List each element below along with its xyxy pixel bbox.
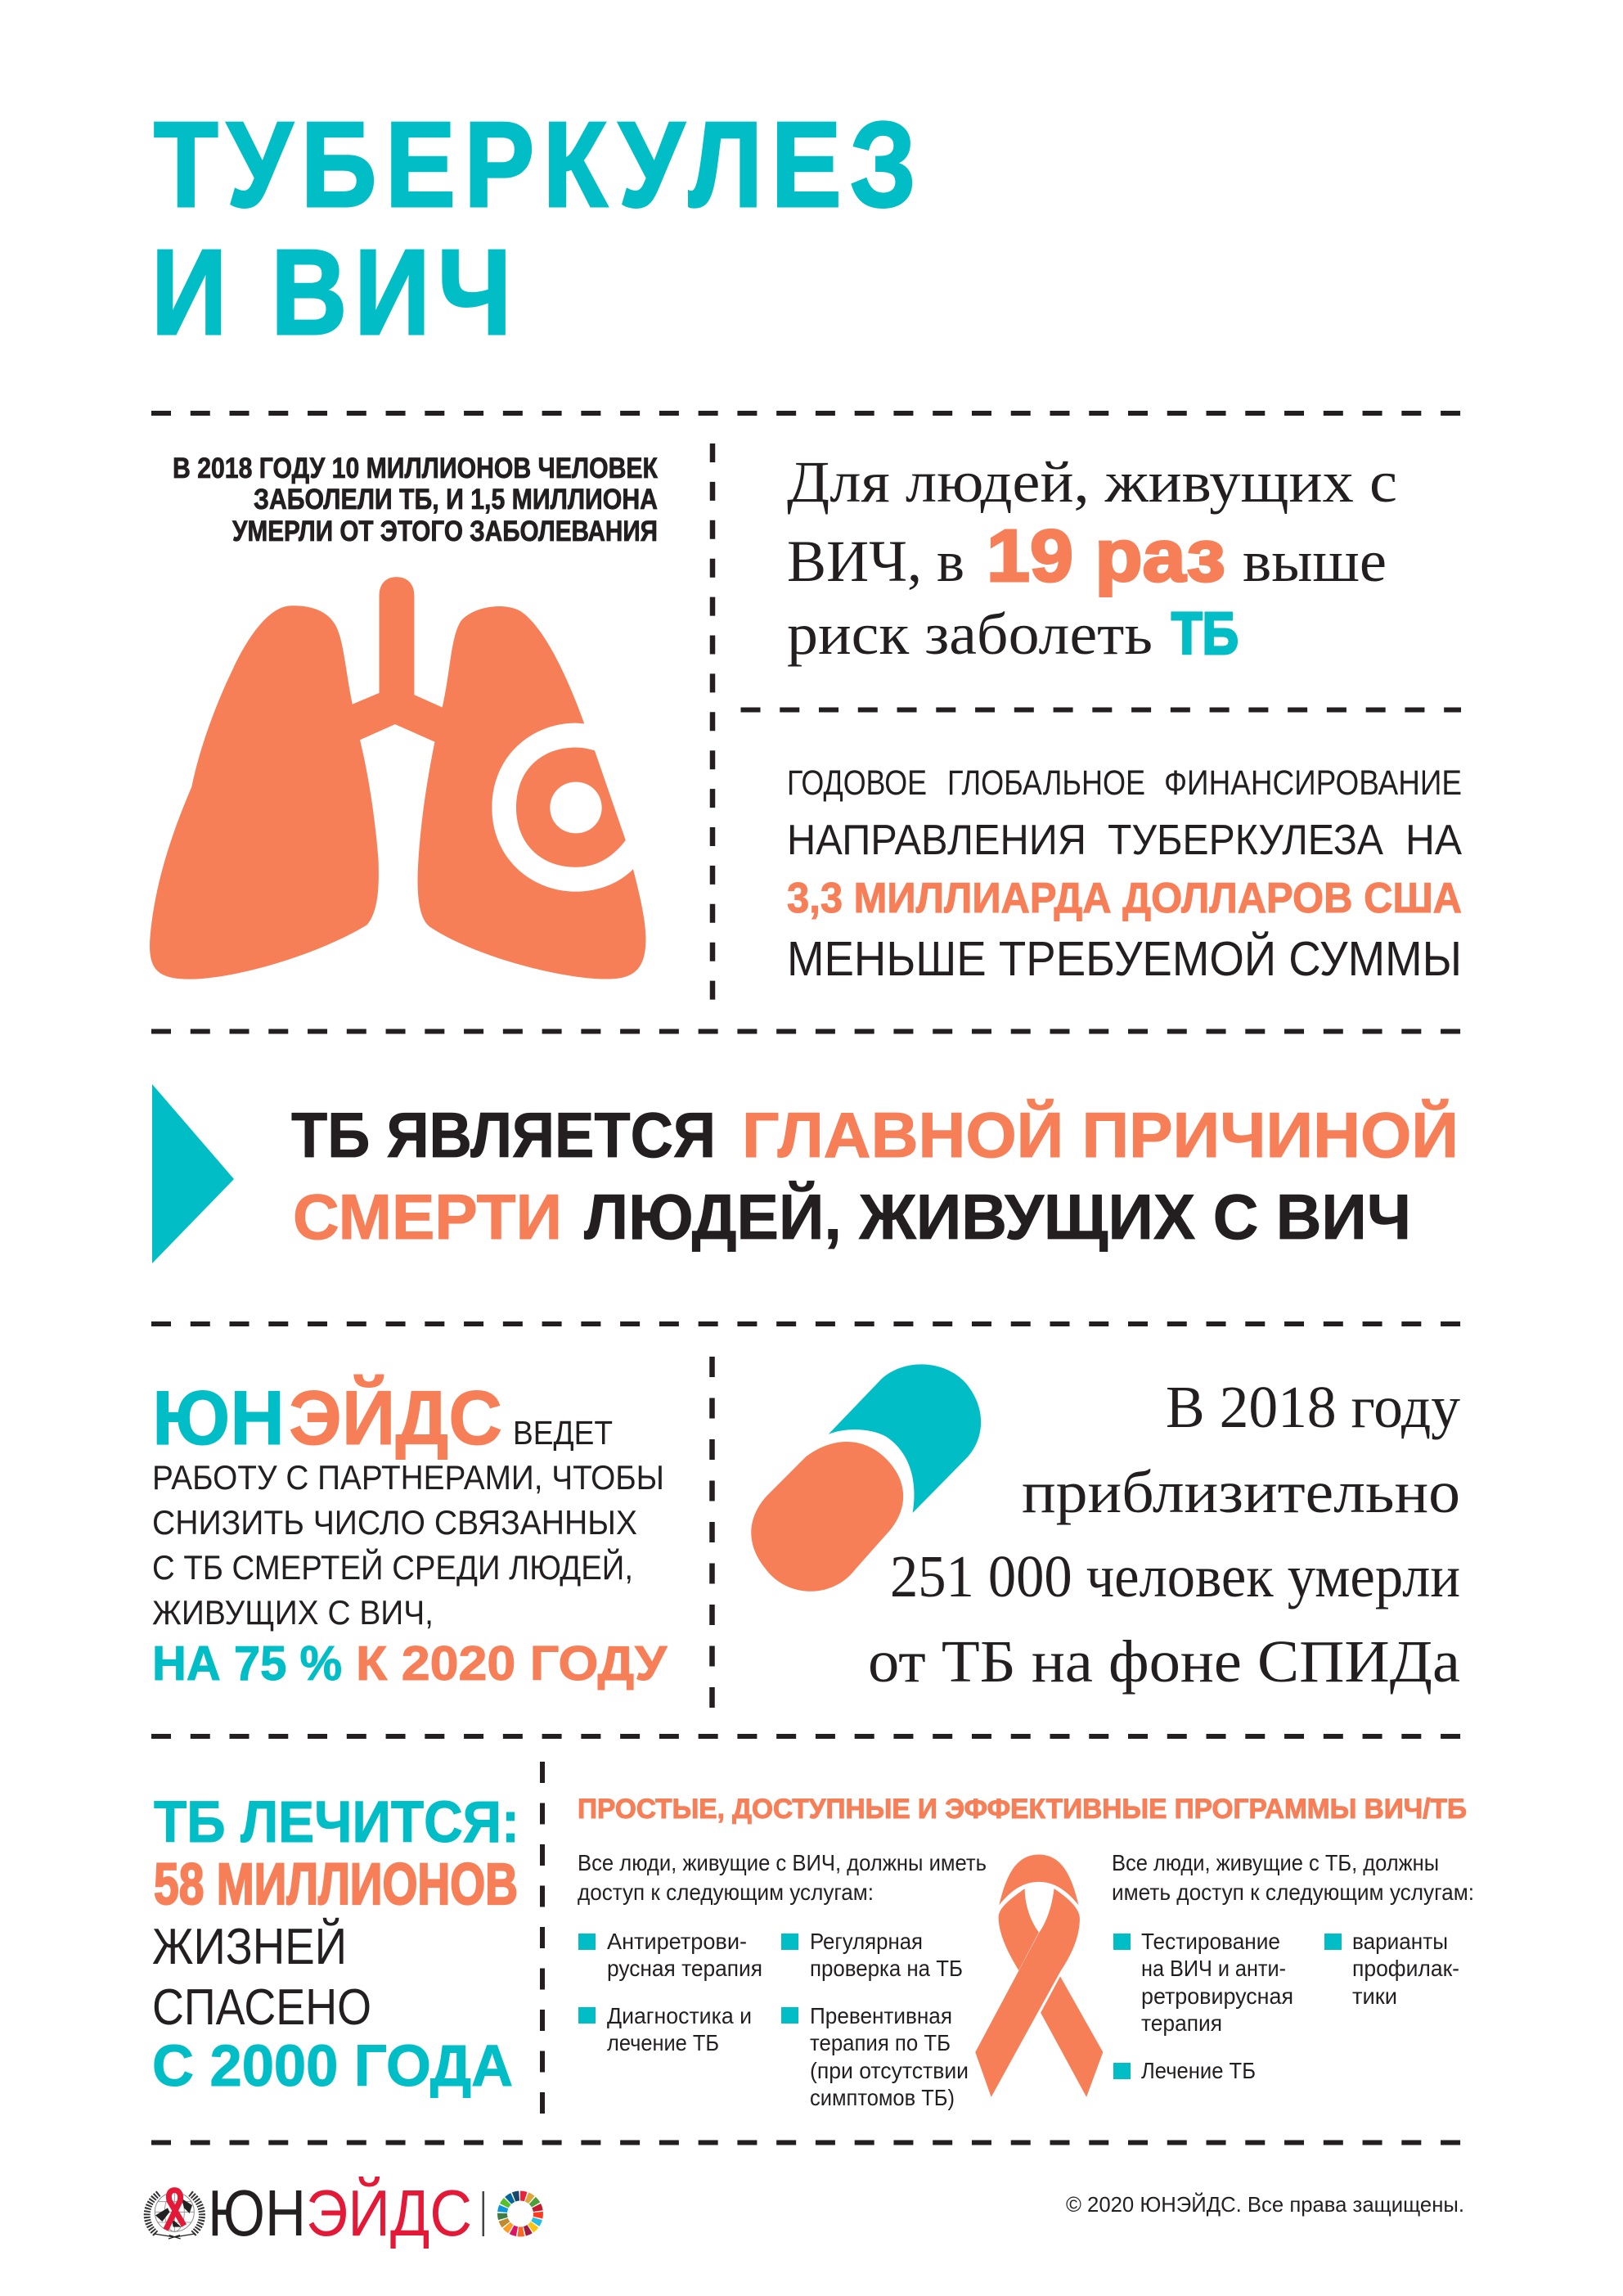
text: 251 000 deaths: В 2018 году bbox=[1166, 1374, 1460, 1440]
text: 251 000 deaths: 251 000 человек умерли bbox=[890, 1543, 1460, 1609]
text: services for people living with HIV: терапия по ТБ bbox=[810, 2030, 951, 2055]
text: UNAIDS target: ЖИВУЩИХ С ВИЧ, bbox=[152, 1593, 434, 1632]
text: services for people with TB bbox=[1112, 1850, 1474, 2083]
text: funding gap: НА bbox=[1405, 817, 1462, 864]
text: services for people with TB: варианты bbox=[1352, 1929, 1448, 1954]
text: 251 000 deaths: от ТБ на фоне СПИДа bbox=[868, 1628, 1460, 1695]
headline: leading cause of death: ТБ ЯВЛЯЕТСЯ bbox=[291, 1099, 716, 1171]
text: services for people living with HIV: лечение ТБ bbox=[607, 2030, 719, 2055]
text: 19 times higher risk: Для людей, живущих с bbox=[787, 449, 1397, 515]
text: 251 000 deaths: приблизительно bbox=[1022, 1459, 1460, 1525]
text: 19 times higher risk: выше bbox=[1243, 529, 1387, 594]
text: services for people with TB: тики bbox=[1352, 1983, 1397, 2009]
text: services for people with TB: терапия bbox=[1141, 2010, 1222, 2036]
text: UNAIDS target: ВЕДЕТ bbox=[513, 1414, 613, 1452]
headline: leading cause of death: ЛЮДЕЙ, ЖИВУЩИХ С ВИЧ bbox=[584, 1181, 1411, 1253]
text: TB is curable: СПАСЕНО bbox=[152, 1979, 371, 2036]
text: services for people living with HIV: Превентивная bbox=[810, 2003, 952, 2028]
text: services for people living with HIV: Антиретрови- bbox=[607, 1929, 747, 1954]
text: services for people living with HIV: Все люди, живущие с ВИЧ, должны иметь bbox=[578, 1850, 987, 1875]
text: TB is curable: ТБ ЛЕЧИТСЯ: bbox=[154, 1790, 519, 1855]
copyright: © 2020 ЮНЭЙДС. Все права защищены. bbox=[1066, 2192, 1464, 2217]
text: UNAIDS target: НА 75 % bbox=[152, 1636, 342, 1690]
headline: leading cause of death: ГЛАВНОЙ ПРИЧИНОЙ bbox=[742, 1099, 1459, 1171]
text: 251 000 deaths bbox=[868, 1374, 1460, 1695]
icon: awareness ribbon bbox=[975, 1855, 1103, 2097]
text: 19 times higher risk: ТБ bbox=[1171, 601, 1239, 667]
text: services for people with TB: профилак- bbox=[1352, 1956, 1459, 1981]
text: 19 times higher risk: риск заболеть bbox=[787, 601, 1153, 667]
text: funding gap: МЕНЬШЕ ТРЕБУЕМОЙ СУММЫ bbox=[787, 931, 1462, 986]
text: UNAIDS target: ЭЙДС bbox=[289, 1374, 502, 1461]
text: funding gap: ГОДОВОЕ bbox=[787, 763, 927, 803]
text: funding gap: ТУБЕРКУЛЕЗА bbox=[1108, 817, 1383, 864]
text: funding gap bbox=[787, 763, 1462, 986]
text: 10 million people: В 2018 ГОДУ 10 МИЛЛИОНОВ ЧЕЛОВЕК bbox=[173, 452, 659, 484]
text: 10 million people: ЗАБОЛЕЛИ ТБ, И 1,5 МИЛЛИОНА bbox=[254, 484, 658, 515]
text: UNAIDS target bbox=[152, 1374, 668, 1690]
title: ТУБЕРКУЛЕЗ bbox=[154, 97, 916, 232]
title bbox=[151, 97, 916, 360]
logo: UNAIDS wordmark: ЮН bbox=[208, 2177, 306, 2249]
text: services for people living with HIV: (при отсутствии bbox=[810, 2058, 969, 2083]
text: funding gap: ГЛОБАЛЬНОЕ bbox=[947, 763, 1145, 803]
logo: UNAIDS wordmark bbox=[208, 2176, 484, 2249]
text: services for people living with HIV: Регулярная bbox=[810, 1929, 923, 1954]
icon: pill capsule bbox=[751, 1364, 981, 1591]
headline: leading cause of death: СМЕРТИ bbox=[293, 1181, 562, 1253]
text: 10 million people bbox=[173, 452, 659, 547]
title: И ВИЧ bbox=[151, 225, 511, 360]
text: services for people with TB: Лечение ТБ bbox=[1141, 2058, 1256, 2083]
text: UNAIDS target: С ТБ СМЕРТЕЙ СРЕДИ ЛЮДЕЙ, bbox=[152, 1547, 633, 1587]
text: services for people living with HIV: русная терапия bbox=[607, 1956, 762, 1981]
text: 19 times higher risk: ВИЧ, в bbox=[787, 529, 964, 594]
text: services for people living with HIV: проверка на ТБ bbox=[810, 1956, 963, 1981]
icon: arrow triangle bbox=[152, 1084, 234, 1263]
text: TB is curable: 58 МИЛЛИОНОВ bbox=[154, 1853, 518, 1917]
text: services for people with TB: Все люди, живущие с ТБ, должны bbox=[1112, 1850, 1439, 1875]
text: services for people with TB: ретровирусная bbox=[1141, 1983, 1293, 2009]
text: UNAIDS target: ЮН bbox=[152, 1375, 285, 1461]
icon: lungs bbox=[150, 577, 645, 979]
text: services for people living with HIV: Диагностика и bbox=[607, 2003, 752, 2028]
logo: SDG wheel bbox=[495, 2188, 546, 2240]
text: services for people with TB: на ВИЧ и анти- bbox=[1141, 1956, 1286, 1981]
logo: UNAIDS emblem bbox=[147, 2190, 202, 2239]
text: 10 million people: УМЕРЛИ ОТ ЭТОГО ЗАБОЛЕВАНИЯ bbox=[232, 515, 658, 547]
text: TB is curable: С 2000 ГОДА bbox=[152, 2034, 513, 2099]
text: funding gap: 3,3 МИЛЛИАРДА ДОЛЛАРОВ США bbox=[787, 875, 1462, 922]
text: services for people living with HIV: симптомов ТБ) bbox=[810, 2085, 955, 2110]
heading: programmes: ПРОСТЫЕ, ДОСТУПНЫЕ И ЭФФЕКТИВНЫЕ ПРОГРАММЫ ВИЧ/ТБ bbox=[578, 1794, 1467, 1825]
headline: leading cause of death bbox=[291, 1099, 1459, 1253]
text: TB is curable: ЖИЗНЕЙ bbox=[152, 1918, 347, 1975]
text: TB is curable bbox=[152, 1790, 519, 2099]
text: services for people living with HIV bbox=[578, 1850, 987, 2110]
text: services for people with TB: иметь доступ к следующим услугам: bbox=[1112, 1880, 1474, 1905]
text: services for people living with HIV: доступ к следующим услугам: bbox=[578, 1880, 874, 1905]
text: funding gap: ФИНАНСИРОВАНИЕ bbox=[1164, 763, 1462, 803]
text: UNAIDS target: СНИЗИТЬ ЧИСЛО СВЯЗАННЫХ bbox=[152, 1503, 637, 1542]
text: services for people with TB: Тестирование bbox=[1141, 1929, 1280, 1954]
logo: UNAIDS wordmark: ЭЙДС bbox=[306, 2176, 472, 2249]
text: UNAIDS target: К 2020 ГОДУ bbox=[356, 1636, 668, 1690]
text: funding gap: НАПРАВЛЕНИЯ bbox=[787, 817, 1086, 864]
text: 19 times higher risk bbox=[787, 449, 1397, 667]
text: 19 times higher risk: 19 раз bbox=[987, 515, 1225, 597]
text: UNAIDS target: РАБОТУ С ПАРТНЕРАМИ, ЧТОБЫ bbox=[152, 1458, 664, 1497]
